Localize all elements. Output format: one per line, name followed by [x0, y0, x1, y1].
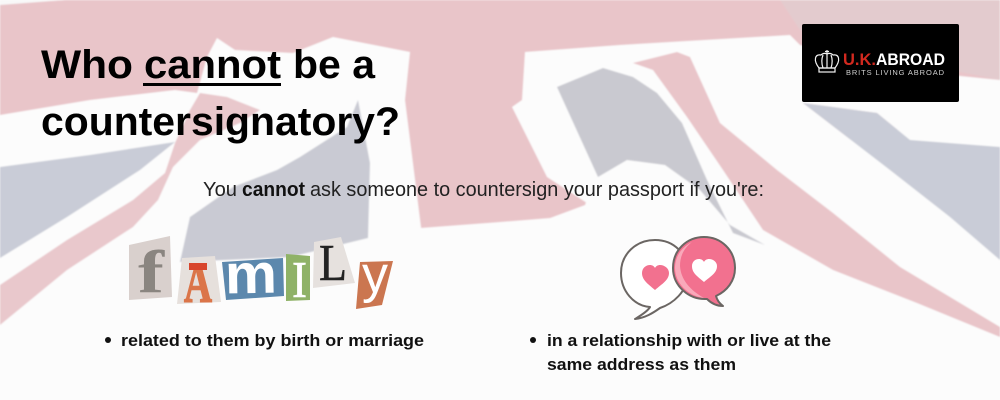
- icon: speech bubbles with hearts: [621, 237, 735, 319]
- intro sentence: You: [203, 179, 237, 201]
- logo tagline: BRITS LIVING ABROAD: [846, 68, 945, 77]
- title: countersignatory?: [41, 100, 400, 144]
- title: [41, 43, 400, 144]
- bullet: relationship: [530, 331, 831, 374]
- intro sentence: cannot: [242, 179, 305, 201]
- title: be a: [293, 43, 376, 87]
- icon: ransom-note family letters: [129, 235, 393, 315]
- right bubble: [673, 237, 735, 306]
- letter L: L: [319, 235, 347, 292]
- logo: U.K. Abroad: [802, 24, 959, 102]
- intro sentence: ask someone to countersign your passport if you're:: [310, 179, 764, 201]
- letter A: A: [184, 253, 212, 315]
- letter f: [129, 236, 172, 305]
- letter y: [356, 246, 393, 309]
- letter m: m: [224, 242, 277, 305]
- left bubble: [621, 240, 688, 319]
- logo: U.K. Abroad: ABROAD: [876, 51, 945, 69]
- letter I: I: [292, 252, 307, 309]
- bullet: relationship: same address as them: [547, 355, 736, 374]
- bullet: relationship: in a relationship with or live at the: [547, 331, 831, 350]
- icon: crown: [815, 50, 839, 72]
- left heart: [642, 265, 669, 290]
- right bubble highlight: [675, 242, 704, 298]
- letter y: y: [362, 246, 388, 304]
- bullet: family: related to them by birth or marriage: [121, 331, 424, 350]
- title: cannot: [144, 43, 281, 87]
- letter f: f: [138, 239, 165, 305]
- right heart: [692, 259, 717, 282]
- title: Who: [41, 43, 133, 87]
- logo wordmark: U.K.: [843, 51, 876, 69]
